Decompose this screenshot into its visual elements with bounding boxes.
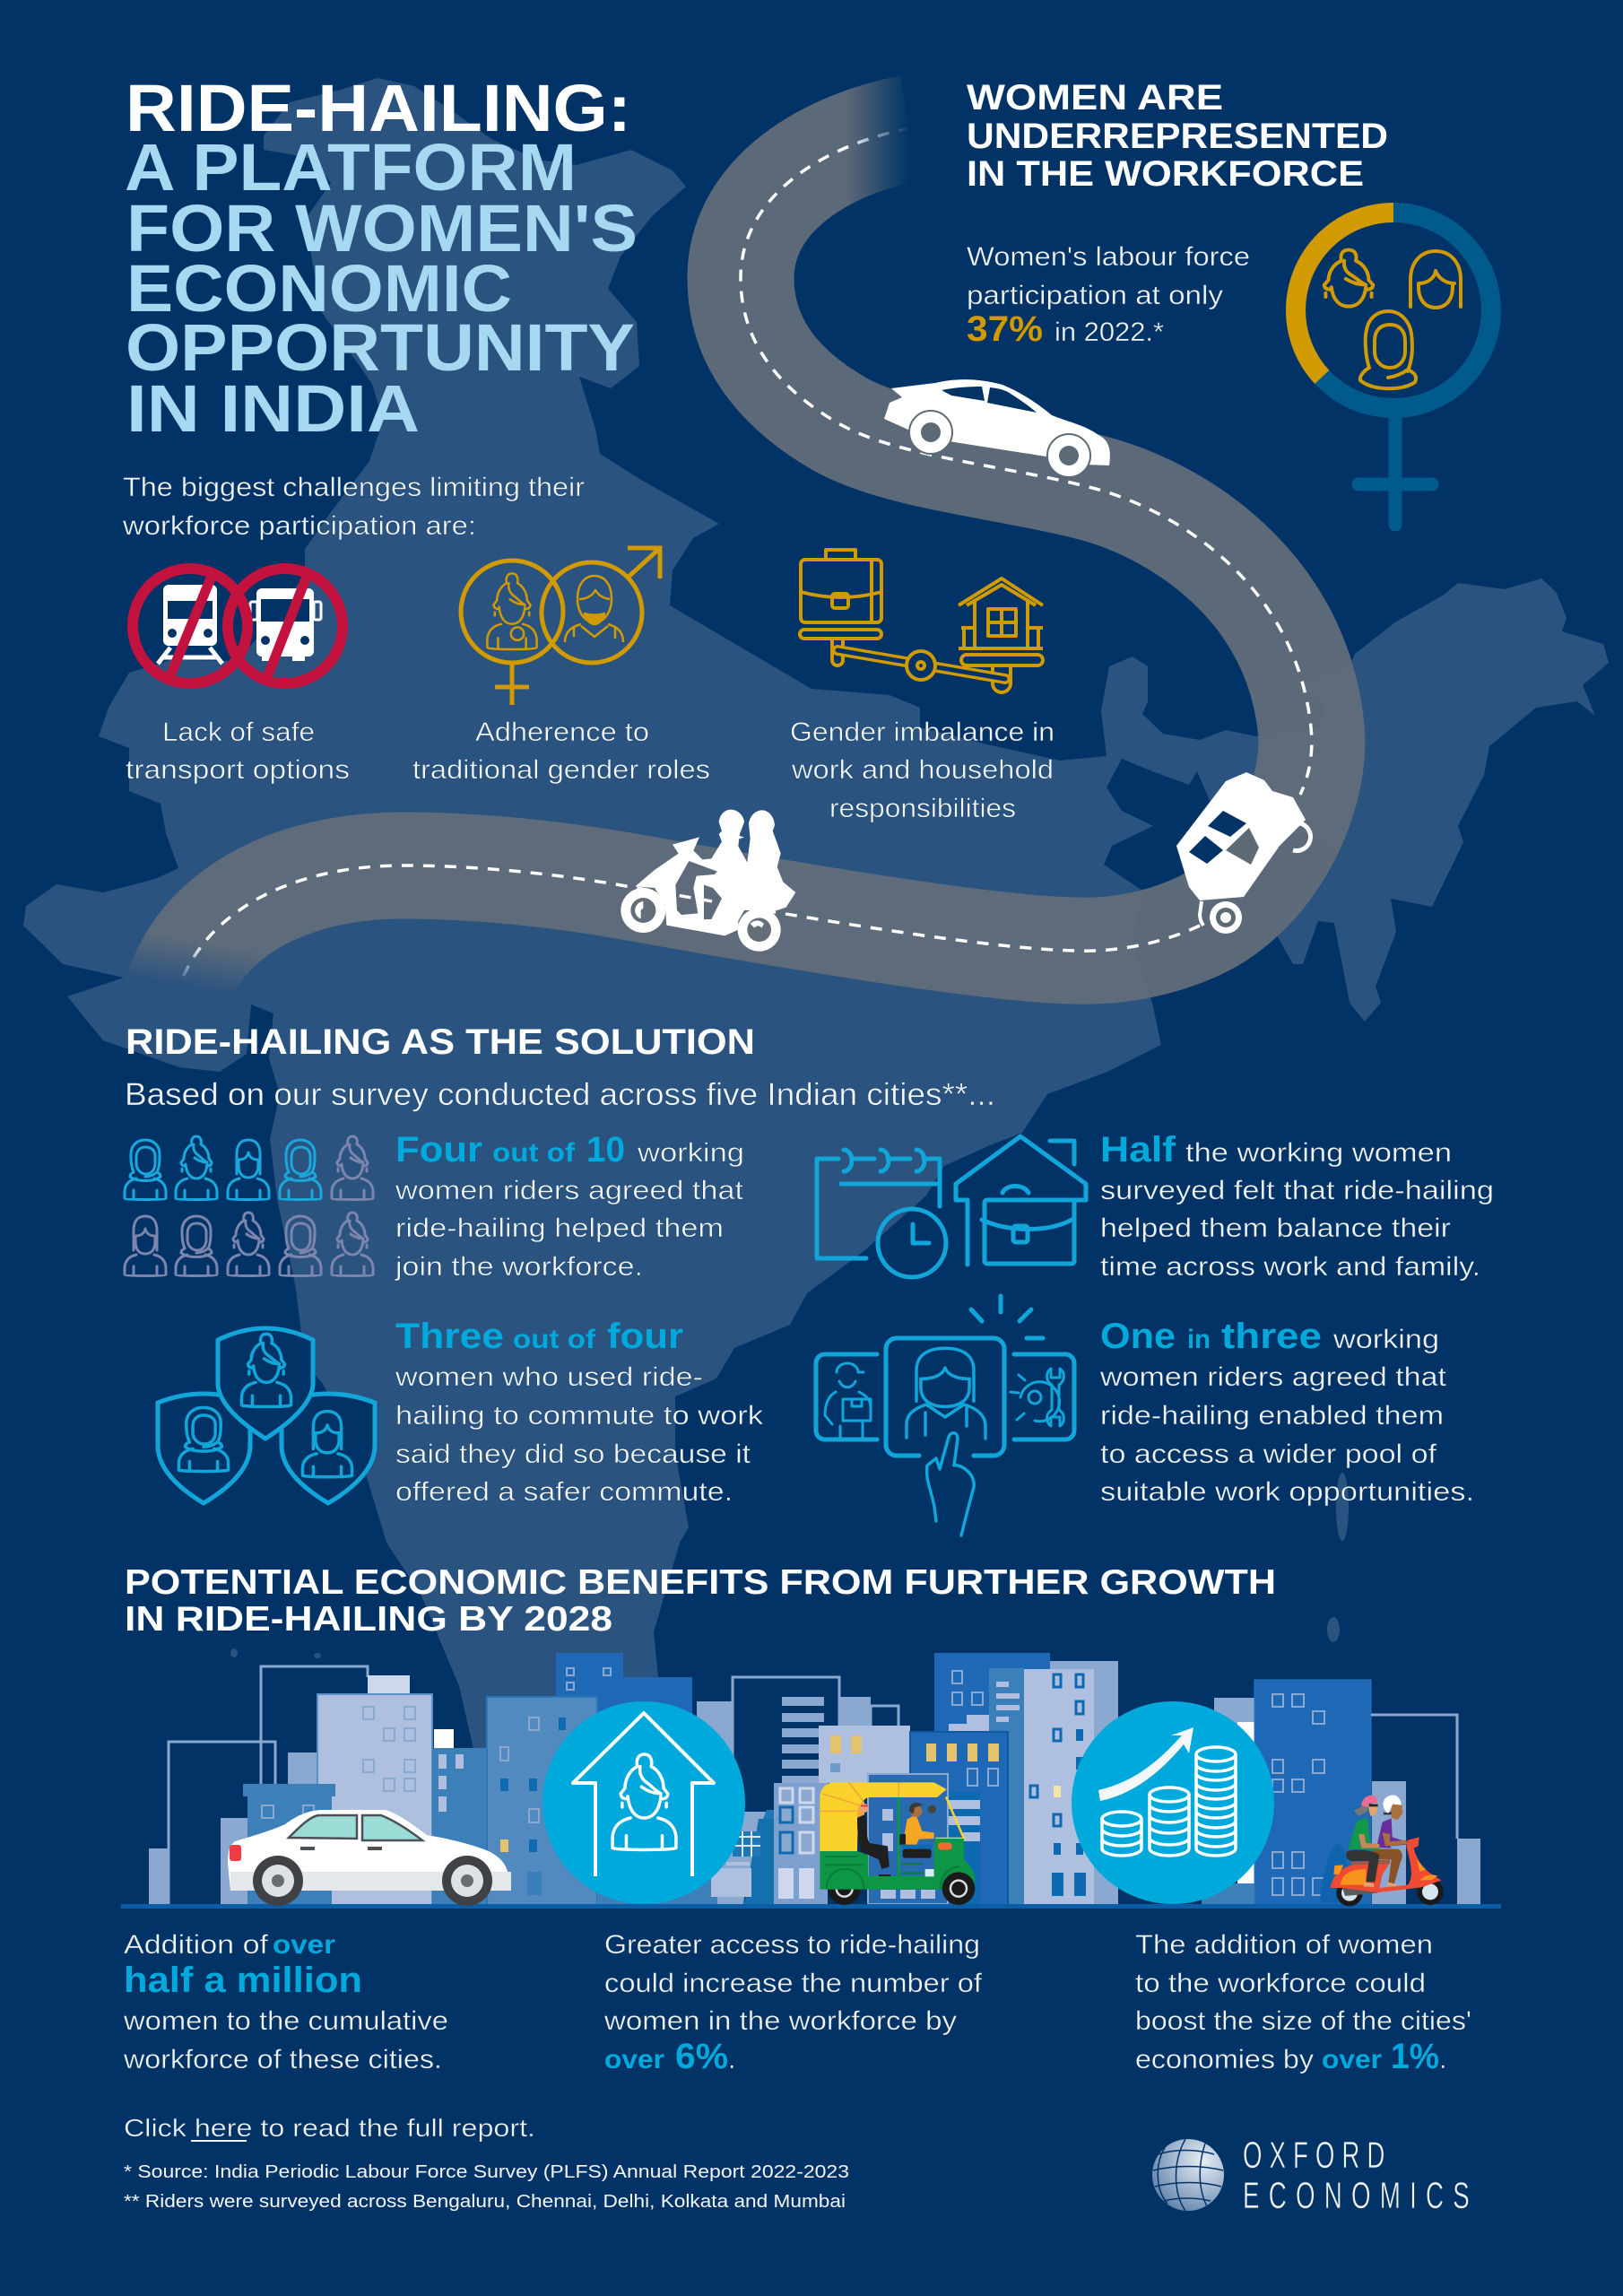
footnotes xyxy=(124,2162,849,2212)
text: half: Half xyxy=(1100,1130,1176,1170)
title: A PLATFORM xyxy=(125,130,577,204)
title: OPPORTUNITY xyxy=(126,310,635,385)
text: four out of 10: out of xyxy=(492,1138,576,1168)
text: half a million women: half a million xyxy=(124,1961,362,2000)
heading: ride-hailing as the solution: RIDE-HAILING AS THE SOLUTION xyxy=(126,1022,755,1062)
text: half xyxy=(1100,1130,1494,1282)
label: gender imbalance: work and household xyxy=(791,755,1054,785)
text: one in three: ride-hailing enabled them xyxy=(1100,1401,1444,1431)
icon: no train, no bus xyxy=(133,569,343,683)
text: one in three: working xyxy=(1332,1325,1439,1354)
icon: white car xyxy=(884,379,1110,477)
text: over 6%: Greater access to ride-hailing xyxy=(604,1930,980,1960)
heading: potential economic benefits: POTENTIAL ECONOMIC BENEFITS FROM FURTHER GROWTH xyxy=(125,1563,1276,1602)
icon: job opportunities touch screen xyxy=(816,1296,1074,1535)
heading: women are underrepresented xyxy=(967,78,1388,194)
icon: auto rickshaw from above xyxy=(1176,772,1310,934)
text: three out of four: said they did so because it xyxy=(395,1439,751,1469)
icon: calendar, clock, house and briefcase xyxy=(817,1136,1086,1277)
icon: three shields with women xyxy=(158,1328,375,1503)
label: lack of safe transport xyxy=(126,718,350,785)
text: over 6%: over xyxy=(604,2045,664,2074)
road with dashed centre line xyxy=(178,128,1312,992)
text: one in three: three xyxy=(1221,1317,1322,1356)
text: three out of four: hailing to commute to work xyxy=(395,1401,764,1431)
text: half: surveyed felt that ride-hailing xyxy=(1100,1176,1494,1205)
text: over 6%: 6% xyxy=(675,2037,728,2076)
text: one in three: suitable work opportunities. xyxy=(1100,1477,1474,1507)
text: over 6%: could increase the number of xyxy=(604,1969,983,1998)
text: four out of 10 xyxy=(395,1130,744,1282)
illustration: green and yellow auto rickshaw xyxy=(820,1782,975,1905)
text: over 6%: . xyxy=(728,2045,735,2074)
icon: gender symbols xyxy=(461,548,660,705)
subheading: survey: Based on our survey conducted across five Indian cities**... xyxy=(125,1077,995,1112)
text: half a million women: workforce of these cities. xyxy=(123,2045,442,2074)
text: one in three: women riders agreed that xyxy=(1099,1362,1447,1392)
heading: women are underrepresented: IN THE WORKFORCE xyxy=(967,154,1364,194)
link text: Click here to read the full report. xyxy=(124,2114,535,2142)
illustration: red scooter with riders xyxy=(1321,1796,1444,1906)
text: four out of 10: ride-hailing helped them xyxy=(395,1213,724,1243)
text: over 1%: to the workforce could xyxy=(1135,1969,1426,1998)
text: over 1%: over xyxy=(1322,2045,1382,2074)
text: half: time across work and family. xyxy=(1100,1252,1480,1282)
text: three out of four: women who used ride- xyxy=(395,1362,703,1392)
heading: potential economic benefits: IN RIDE-HAILING BY 2028 xyxy=(125,1600,612,1639)
footnotes: * Source: India Periodic Labour Force Survey (PLFS) Annual Report 2022-2023 xyxy=(124,2162,849,2182)
text: labour force participation xyxy=(967,242,1250,349)
title: ECONOMIC xyxy=(126,251,512,326)
logo: Oxford Economics xyxy=(1152,2134,1470,2216)
text: three out of four: out of xyxy=(513,1325,596,1354)
text: half: helped them balance their xyxy=(1100,1213,1451,1243)
text: half a million women: Addition of xyxy=(124,1930,269,1960)
text: over 1%: The addition of women xyxy=(1135,1930,1433,1960)
icon: scooter with two women xyxy=(621,810,795,952)
text: four out of 10: Four xyxy=(395,1130,482,1170)
text: half a million women: women to the cumulative xyxy=(123,2006,448,2036)
text: over 1% xyxy=(1135,1930,1471,2076)
text: one in three: in xyxy=(1187,1325,1211,1354)
icon: work and household balance xyxy=(800,550,1043,692)
heading: women are underrepresented: WOMEN ARE xyxy=(967,78,1223,117)
text: three out of four: Three xyxy=(395,1317,504,1356)
title: RIDE-HAILING: xyxy=(126,71,631,145)
logo: Oxford Economics: ECONOMICS xyxy=(1243,2174,1470,2216)
heading: women are underrepresented: UNDERREPRESENTED xyxy=(967,117,1388,156)
text: half a million women: over xyxy=(273,1930,335,1960)
text: four out of 10: working xyxy=(637,1138,744,1168)
icon: cyan circle, coins and growth arrow xyxy=(1072,1701,1274,1904)
text: one in three xyxy=(1099,1317,1474,1507)
label: gender roles: Adherence to xyxy=(475,718,649,747)
text: half a million women xyxy=(123,1930,448,2074)
label: gender roles xyxy=(412,718,710,785)
text: three out of four: four xyxy=(607,1317,683,1356)
label: gender roles: traditional gender roles xyxy=(412,755,710,785)
intro text: workforce participation are: xyxy=(122,511,476,541)
text: labour force participation: participation at only xyxy=(967,281,1223,310)
text: labour force participation: 37% xyxy=(967,309,1043,349)
text: over 1%: boost the size of the cities' xyxy=(1135,2006,1471,2036)
text: over 6% xyxy=(603,1930,983,2076)
street line xyxy=(121,1904,1501,1909)
text: over 1%: 1% xyxy=(1391,2037,1439,2076)
text: over 6%: women in the workforce by xyxy=(603,2006,957,2036)
text: over 1%: economies by xyxy=(1135,2045,1314,2074)
text: half: the working women xyxy=(1185,1138,1452,1168)
city skyline xyxy=(149,1653,1480,1906)
footnotes: ** Riders were surveyed across Bengaluru, Chennai, Delhi, Kolkata and Mumbai xyxy=(124,2192,846,2212)
text: three out of four xyxy=(395,1317,764,1507)
icon: cyan circle, woman in up arrow xyxy=(542,1701,745,1904)
chart: 37% donut female symbol xyxy=(1296,213,1491,525)
map of India xyxy=(23,78,1609,1830)
text: one in three: One xyxy=(1100,1317,1176,1356)
text: labour force participation: in 2022.* xyxy=(1055,317,1164,347)
label: gender imbalance xyxy=(790,718,1055,823)
icon: ten women pictogram xyxy=(125,1136,373,1275)
text: over 1%: . xyxy=(1439,2045,1446,2074)
label: gender imbalance: responsibilities xyxy=(829,794,1016,823)
text: four out of 10: join the workforce. xyxy=(395,1252,643,1282)
title: FOR WOMEN'S xyxy=(126,191,638,265)
text: one in three: to access a wider pool of xyxy=(1100,1439,1437,1469)
heading: potential economic benefits xyxy=(125,1563,1276,1639)
label: gender imbalance: Gender imbalance in xyxy=(790,718,1055,747)
title xyxy=(125,71,638,446)
text: three out of four: offered a safer commute. xyxy=(395,1477,733,1507)
intro text: The biggest challenges limiting their xyxy=(123,473,585,502)
text: four out of 10: women riders agreed that xyxy=(395,1176,744,1205)
illustration: white car xyxy=(228,1810,511,1906)
logo: Oxford Economics: OXFORD xyxy=(1243,2134,1384,2176)
label: lack of safe transport: Lack of safe xyxy=(162,718,315,747)
text: labour force participation: Women's labour force xyxy=(967,242,1250,272)
label: lack of safe transport: transport options xyxy=(126,755,350,785)
intro text xyxy=(122,473,585,541)
title: IN INDIA xyxy=(126,371,420,446)
text: four out of 10: 10 xyxy=(586,1130,625,1170)
